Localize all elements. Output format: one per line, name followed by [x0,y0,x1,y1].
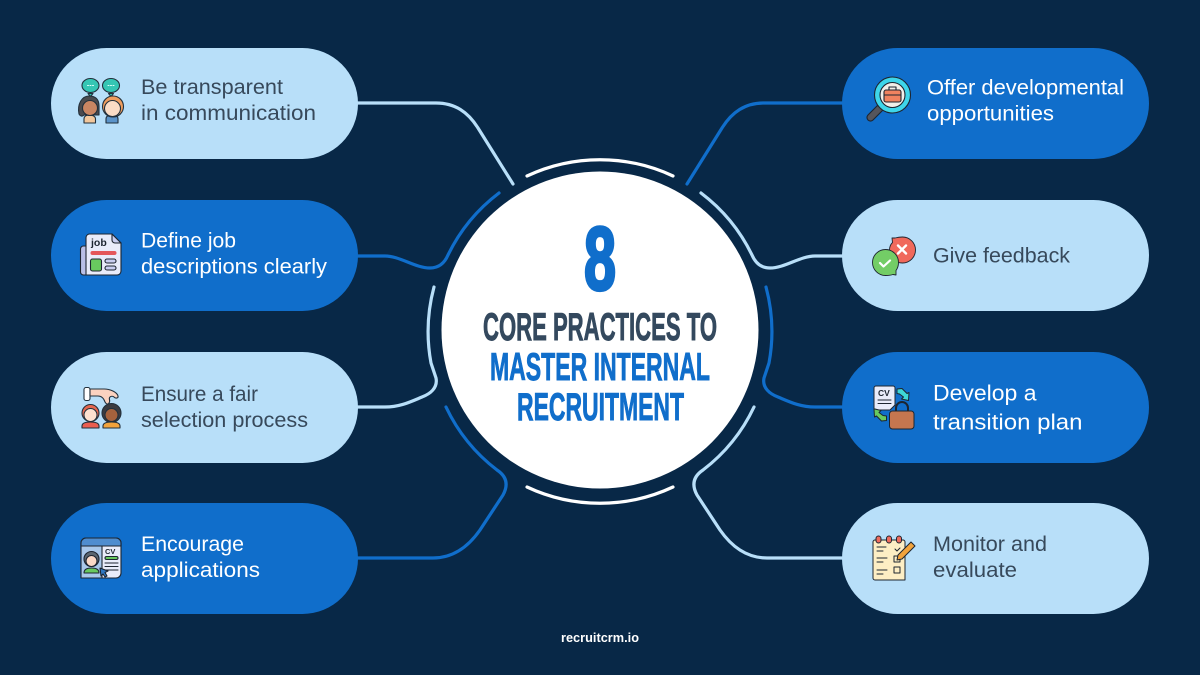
connector: job descriptions to ring [358,193,499,268]
connector: feedback to ring [701,193,842,268]
text [933,533,1047,582]
text: Define job [141,230,236,252]
text: Ensure a fair [141,383,258,406]
text: applications [141,559,260,582]
icon: job description document [80,234,121,275]
ring arc: bottom [527,487,673,503]
connector: transition plan to ring [764,287,842,407]
text: in communication [141,102,316,125]
text: evaluate [933,559,1017,582]
text: Be transparent [141,76,283,99]
panel: offer developmental opportunities [842,48,1149,159]
connector: developmental opportunities to ring [687,103,842,184]
panel: be transparent in communication [51,48,358,159]
icon: hand picking two candidates [82,388,121,428]
icon: CV swapping with briefcase [874,386,914,429]
text [933,380,1082,434]
panel: ensure a fair selection process [51,352,358,463]
panel: monitor and evaluate [842,503,1149,614]
text: transition plan [933,410,1082,434]
icon: two people with speech bubbles [79,78,124,123]
title line: master internal: MASTER INTERNAL [490,346,710,389]
icon: browser window with CV [81,538,121,578]
title number: 8 [584,210,616,310]
text: Encourage [141,533,244,556]
icon: CV swapping with briefcase: CV [878,388,890,398]
text: Offer developmental [927,76,1124,100]
centre circle with title [442,172,758,488]
text: descriptions clearly [141,256,328,278]
text: Monitor and [933,533,1047,556]
text: opportunities [927,102,1054,126]
connector: fair selection to ring [358,287,436,407]
connector: monitor and evaluate to ring [694,407,842,558]
panel: develop a transition plan [842,352,1149,463]
text: selection process [141,409,308,432]
text [141,230,328,278]
panel: encourage applications [51,503,358,614]
footer brand: recruitcrm.io [561,631,639,645]
connector: transparent communication to ring [358,103,513,184]
icon: red and green feedback bubbles [872,237,916,276]
icon: notepad with pencil [873,536,915,580]
icon: browser window with CV: CV [105,547,115,556]
panel: give feedback [842,200,1149,311]
text [927,76,1124,126]
connector: encourage applications to ring [358,407,506,558]
text [141,533,260,582]
text [141,383,308,432]
title line: core practices to: CORE PRACTICES TO [483,306,717,349]
ring arc: top [527,160,673,176]
text [141,76,316,125]
panel: define job descriptions clearly [51,200,358,311]
text: Develop a [933,380,1037,406]
title line: recruitment: RECRUITMENT [517,386,684,429]
text: Give feedback [933,244,1071,268]
icon: job description document: job [90,237,107,249]
icon: magnifier over briefcase [867,77,910,121]
